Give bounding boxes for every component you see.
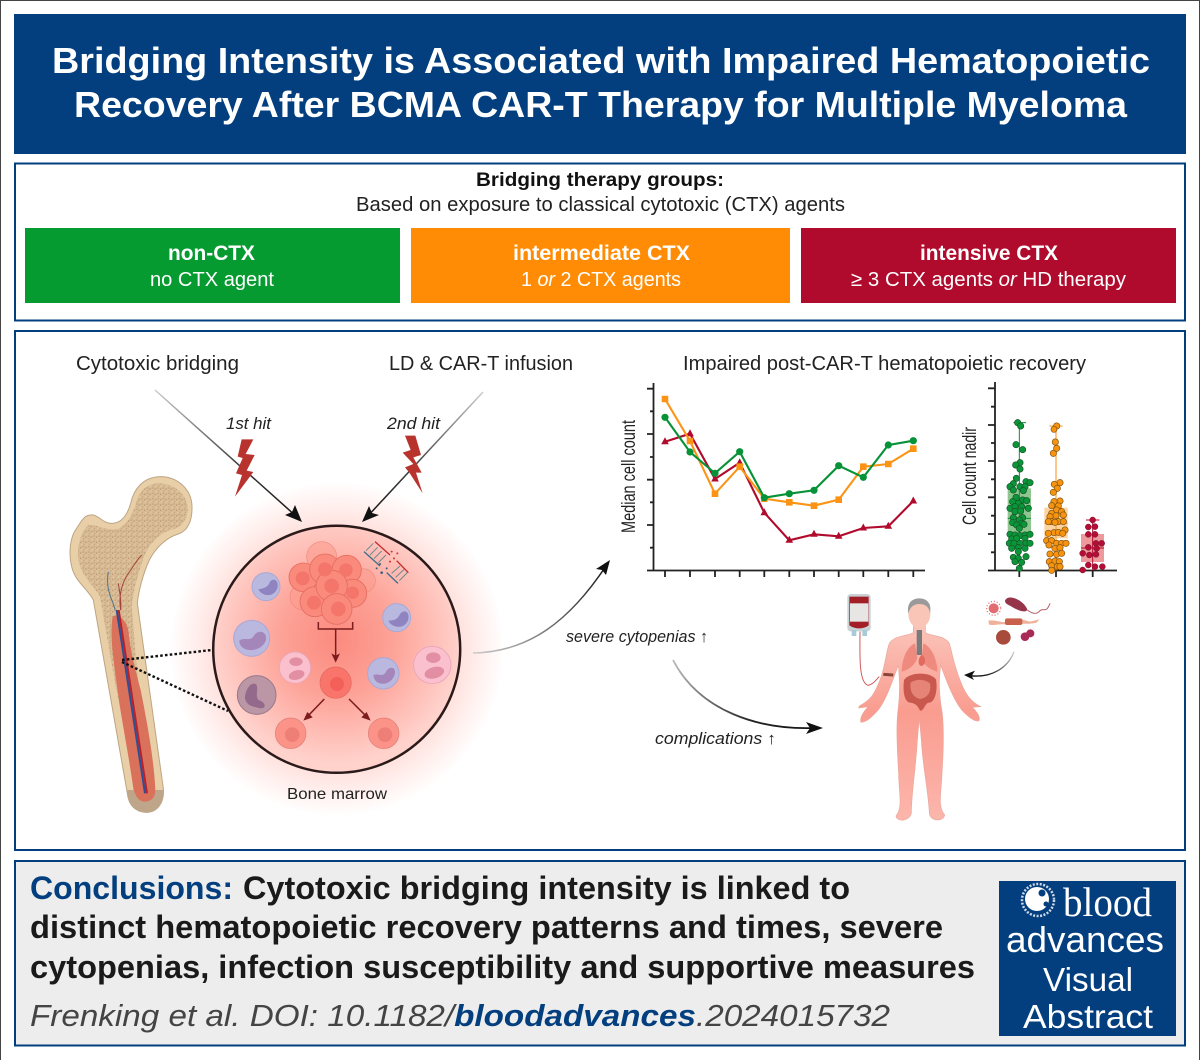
illustration: patient with transfusion and infection [847,594,1050,820]
group: intermediate CTX: intermediate CTX [513,242,690,265]
group: non-CTX: non-CTX [168,242,255,265]
citation: Frenking et al. DOI: 10.1182/ bloodadvances .2024015732 [30,998,890,1033]
logo: blood advances visual abstract: blood [1063,879,1152,925]
label: bone marrow: Bone marrow [287,786,387,803]
connector: zoom lines from marrow [122,650,228,711]
group: intermediate CTX [411,228,790,303]
white blood cell: monocyte [237,676,276,714]
progenitor cell [320,667,351,698]
white blood cells: pink [279,646,451,684]
label: impaired recovery: Impaired post-CAR-T hematopoietic recovery [683,352,1087,375]
conclusion text: distinct hematopoietic recovery patterns and times, severe [30,909,943,945]
arrow: infection to patient [964,652,1014,680]
conclusion text: cytopenias, infection susceptibility and supportive measures [30,949,975,985]
panel: bridging therapy groups [15,164,1185,320]
label: cytotoxic bridging: Cytotoxic bridging [76,352,239,375]
arrow: marrow to recovery [473,560,610,653]
conclusion text: Cytotoxic bridging intensity is linked to [243,870,850,906]
title banner [14,14,1186,154]
group: intermediate CTX: 1 or 2 CTX agents [521,268,681,291]
label: severe cytopenias: severe cytopenias ↑ [566,628,708,646]
title banner: Recovery After BCMA CAR-T Therapy for Multiple Myeloma [74,84,1128,125]
line chart: median cell count [619,383,925,577]
series: non-CTX [661,414,917,501]
DNA damage [364,542,408,583]
logo: blood advances visual abstract: advances [1006,919,1164,960]
logo: blood advances visual abstract [999,879,1176,1036]
arrow: second hit [362,392,483,522]
conclusion text: Conclusions: [30,870,233,906]
label: 1st hit: 1st hit [226,415,272,433]
malignant plasma cell cluster [289,542,375,624]
icon: lightning bolt 2 [403,436,423,493]
panel: conclusions [15,861,1185,1046]
axis title: Cell count nadir [960,427,981,525]
icon: lightning bolt 1 [235,439,255,497]
group: intensive CTX [801,228,1176,303]
group: intensive CTX: intensive CTX [920,242,1058,265]
subheading: exposure basis: Based on exposure to classical cytotoxic (CTX) agents [356,194,845,216]
illustration: bone marrow niche [171,483,503,815]
group: intensive CTX: ≥ 3 CTX agents or HD therapy [851,268,1127,291]
title banner: Bridging Intensity is Associated with Impaired Hematopoietic [52,40,1150,81]
group: intermediate CTX dots [1043,423,1069,573]
inhibition bracket and arrow [318,622,353,663]
arrow: first hit [155,390,302,522]
heading: bridging therapy groups: Bridging therapy groups: [476,169,724,191]
white blood cells: blue [234,573,411,689]
group: intensive CTX dots [1080,517,1105,573]
scatter box plot: cell count nadir [960,382,1117,577]
conclusion text [30,870,975,985]
illustration: femur bone [70,477,192,812]
label: complications: complications ↑ [655,730,776,748]
body [859,598,981,820]
group: non-CTX dots [1006,419,1033,571]
label: LD and CAR-T infusion: LD & CAR-T infusion [389,352,573,375]
division arrows [303,699,371,721]
group: non-CTX [25,228,400,303]
organs [902,630,937,711]
icon: society seal [1022,884,1054,916]
series: intermediate CTX [662,396,917,509]
panel: mechanism and outcomes [15,331,1185,850]
blood bag [847,594,893,685]
axes [647,383,925,577]
axis title: Median cell count [619,419,640,533]
group: non-CTX: no CTX agent [150,268,274,291]
logo: blood advances visual abstract: Abstract [1023,998,1153,1035]
series: intensive CTX [661,429,917,543]
daughter cells [275,718,399,749]
arrow: cytopenias to complications [673,660,823,734]
pathogens [987,598,1050,645]
logo: blood advances visual abstract: Visual [1043,961,1133,998]
label: 2nd hit: 2nd hit [386,415,442,433]
axes [988,382,1117,577]
